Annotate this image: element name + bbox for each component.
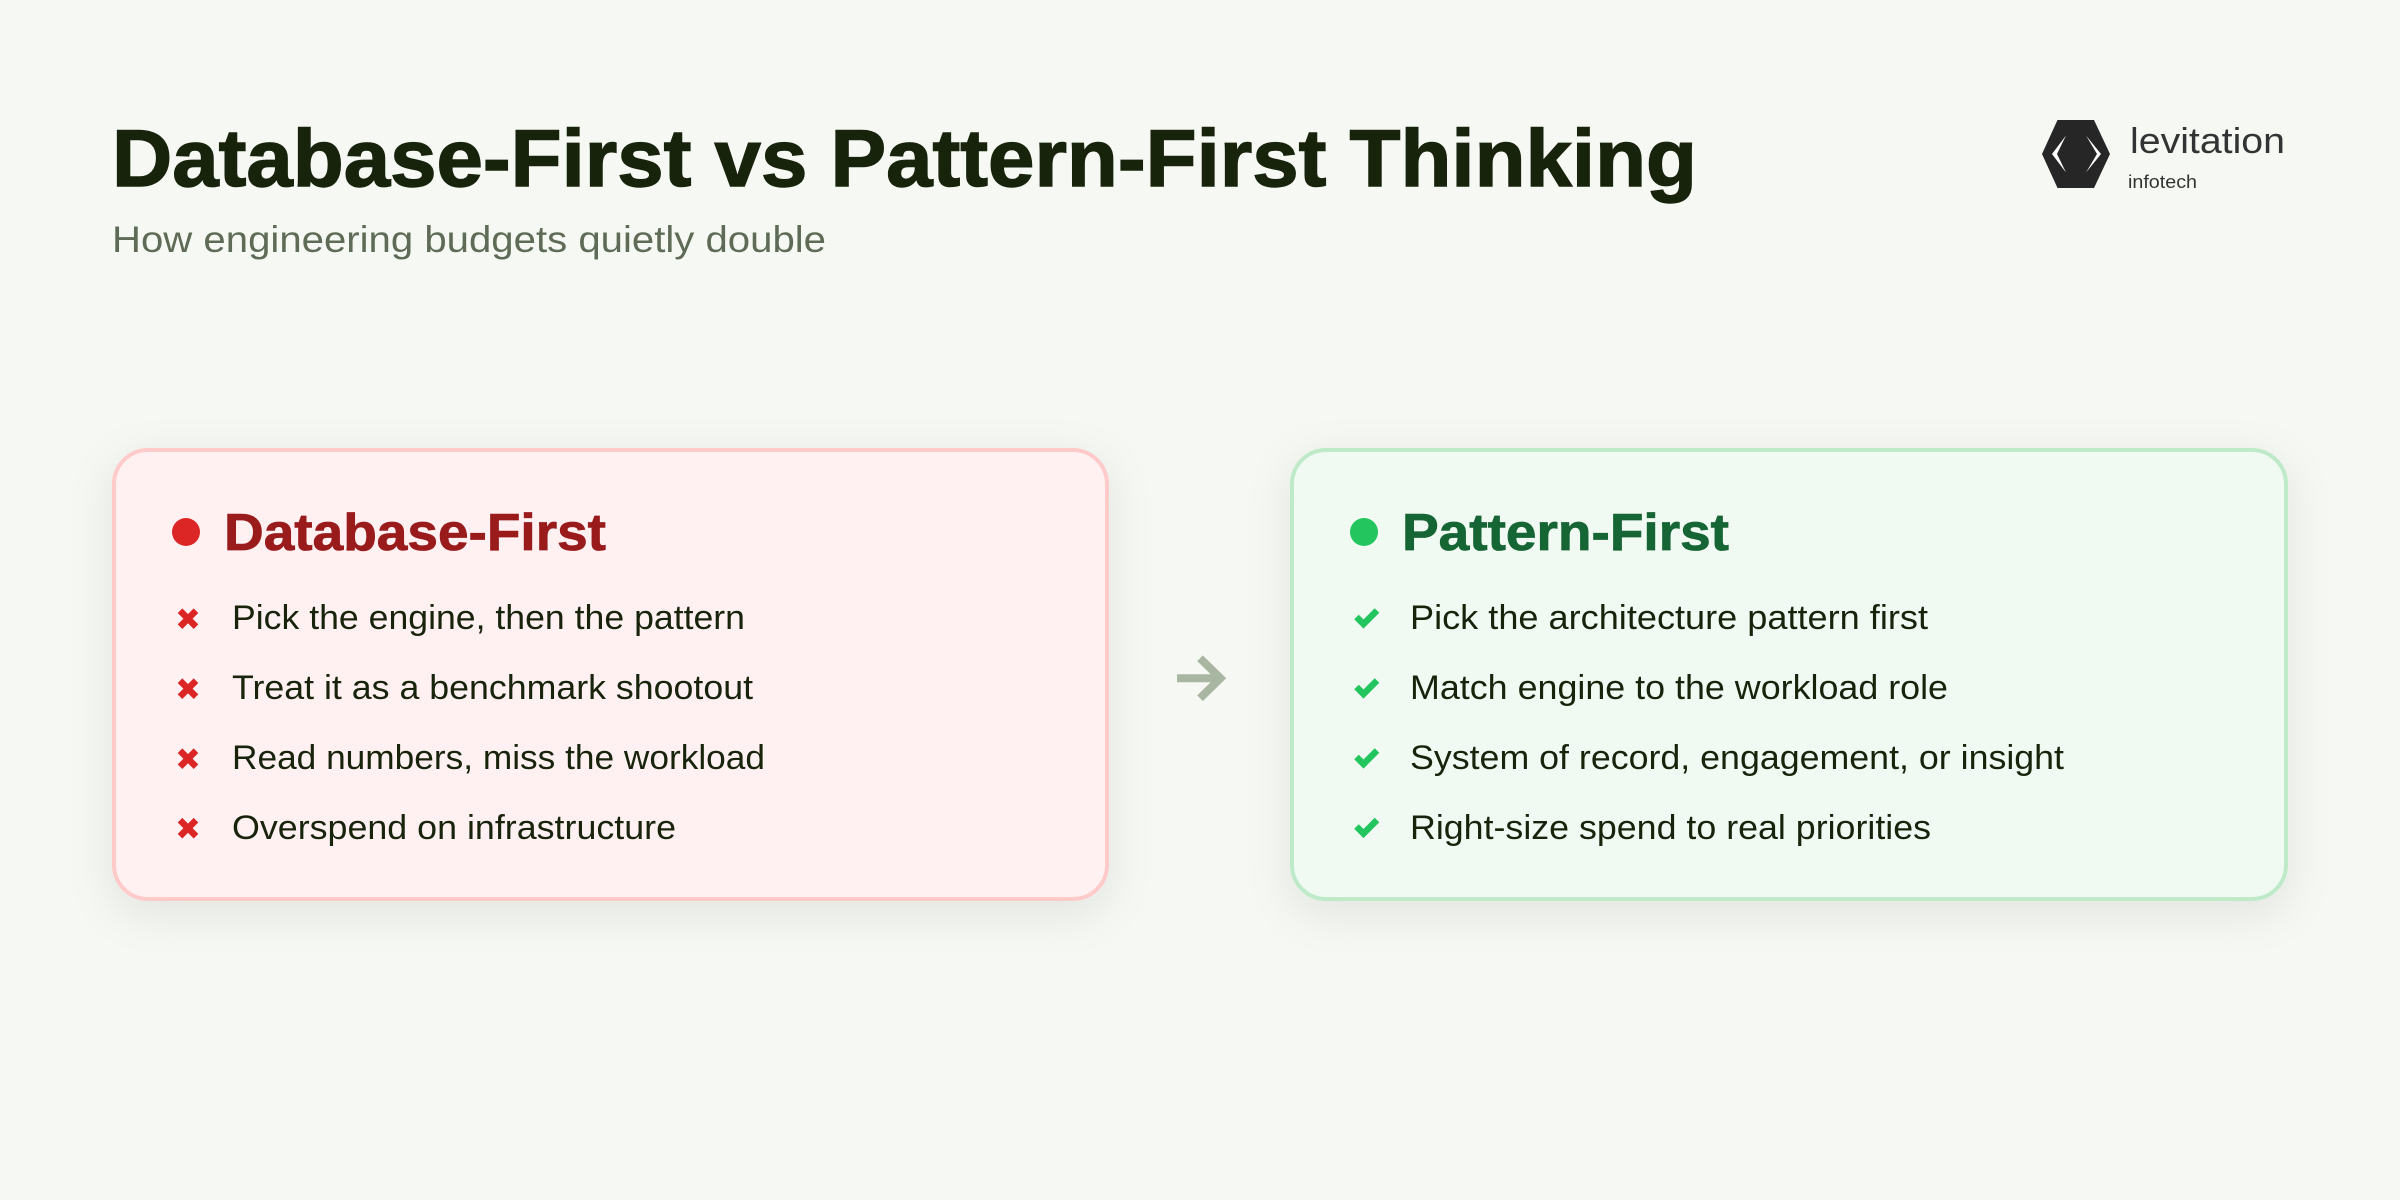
logo: levitation infotech (2042, 120, 2285, 192)
panel background (1292, 450, 2286, 899)
panel background (114, 450, 1107, 899)
list item 2: Treat it as a benchmark shootout (232, 669, 754, 707)
logo tagline: infotech (2128, 172, 2197, 192)
list item 4: Right-size spend to real priorities (1410, 809, 1931, 847)
list item 1: Pick the architecture pattern first (1410, 599, 1929, 637)
title: Database-First vs Pattern-First Thinking (112, 114, 1697, 204)
logo wordmark: levitation (2130, 120, 2285, 161)
icon: hexagon logo mark (2042, 120, 2110, 188)
icon: green status dot (1350, 518, 1378, 546)
list item 4: Overspend on infrastructure (232, 809, 676, 847)
subtitle: How engineering budgets quietly double (112, 219, 826, 260)
heading: Database-First: Database-First (224, 504, 606, 562)
arrow (1177, 658, 1222, 698)
icon: red status dot (172, 518, 200, 546)
list item 1: Pick the engine, then the pattern (232, 599, 745, 637)
panel: Pattern-First (1292, 450, 2286, 899)
list item 3: System of record, engagement, or insight (1410, 739, 2065, 777)
list item 3: Read numbers, miss the workload (232, 739, 765, 777)
heading: Pattern-First: Pattern-First (1402, 504, 1729, 562)
panel: Database-First (114, 450, 1107, 899)
list item 2: Match engine to the workload role (1410, 669, 1948, 707)
